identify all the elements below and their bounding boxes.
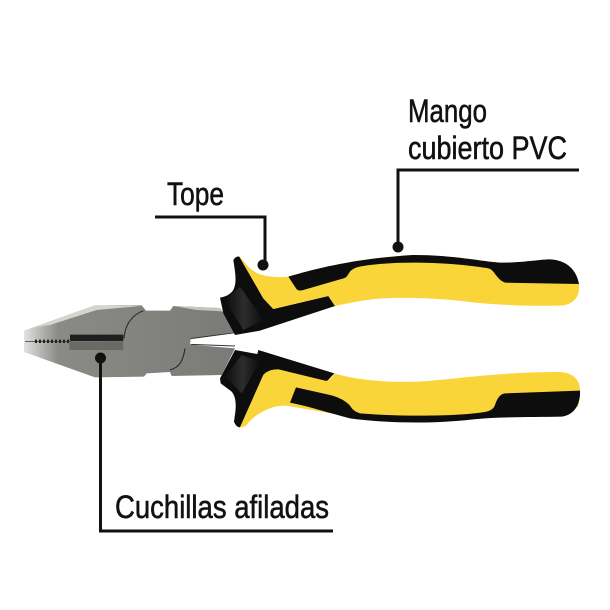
label: Tope: Tope	[167, 176, 224, 212]
jaw opening	[190, 327, 263, 355]
top handle	[220, 255, 579, 335]
label: Cuchillas afiladas: Cuchillas afiladas	[115, 489, 329, 525]
callout: Cuchillas afiladas	[95, 352, 333, 531]
callout: Tope	[155, 176, 268, 270]
label: Mango cubierto PVC: Mango	[408, 93, 487, 129]
jaw gripping teeth	[25, 340, 70, 342]
pliers illustration	[24, 255, 580, 427]
cutting blade slot	[69, 335, 123, 350]
bottom handle	[220, 350, 580, 427]
callout: Mango cubierto PVC	[392, 93, 579, 252]
pliers steel head	[24, 305, 263, 377]
label: Mango cubierto PVC: cubierto PVC	[408, 130, 567, 166]
